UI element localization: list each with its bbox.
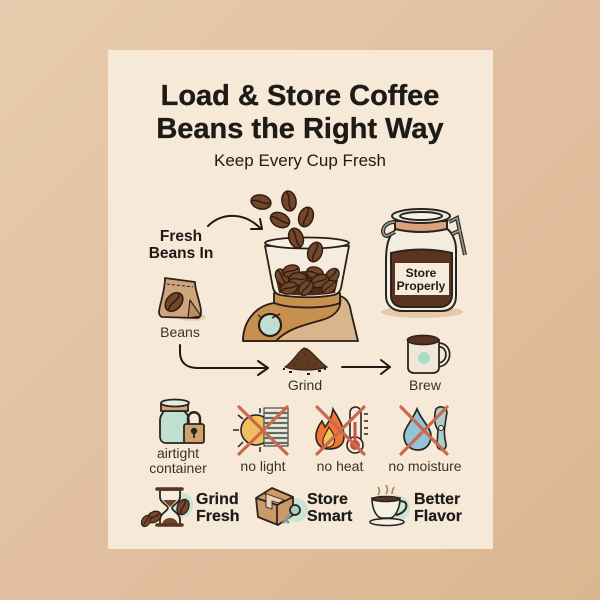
icon: no light [233, 407, 288, 454]
icon: storage jar [381, 209, 465, 318]
label: better flavor: Better [414, 491, 460, 508]
heading: fresh beans in [149, 228, 213, 262]
label: no light: no light [240, 458, 286, 474]
label: better flavor [414, 491, 462, 525]
title [156, 80, 444, 145]
icon: ground coffee [283, 348, 327, 374]
label: better flavor: Flavor [414, 508, 462, 525]
label: store smart [307, 491, 353, 525]
icon: hourglass [139, 489, 193, 528]
icon: box and key [256, 488, 308, 525]
label: store properly: Store [406, 266, 437, 280]
icon: grinder [243, 238, 358, 341]
label: grind fresh [196, 491, 240, 525]
label: brew: Brew [409, 377, 442, 393]
arrow: into grinder [208, 216, 262, 229]
icon: no moisture [401, 407, 447, 454]
icon: airtight container [160, 400, 204, 443]
icon: bean bag [159, 278, 206, 321]
heading: fresh beans in: Fresh [160, 228, 202, 245]
icon: no heat [316, 407, 368, 454]
icon: coffee cup on saucer [370, 485, 410, 526]
label: airtight container [149, 445, 207, 476]
label: grind fresh: Grind [196, 491, 239, 508]
label: store smart: Smart [307, 508, 353, 525]
panel: poster card [108, 50, 493, 549]
label: airtight container: airtight [157, 445, 199, 461]
title: Load & Store Coffee [161, 80, 439, 112]
arrow: beans to grind [180, 345, 268, 375]
label: no heat: no heat [317, 458, 363, 474]
falling coffee beans [250, 190, 325, 264]
label: grind fresh: Fresh [196, 508, 240, 525]
icon: coffee mug [408, 336, 448, 373]
label: store properly [397, 266, 446, 293]
label: no moisture: no moisture [388, 458, 462, 474]
beans in hopper [273, 263, 342, 298]
heading: fresh beans in: Beans In [149, 245, 213, 262]
label: beans: Beans [160, 324, 200, 340]
label: grind: Grind [288, 377, 322, 393]
title: Beans the Right Way [156, 113, 444, 145]
arrow: grind to brew [342, 360, 390, 374]
label: store smart: Store [307, 491, 348, 508]
label: store properly: Properly [397, 279, 446, 293]
subtitle: Keep Every Cup Fresh [214, 151, 386, 170]
label: airtight container: container [149, 460, 207, 476]
